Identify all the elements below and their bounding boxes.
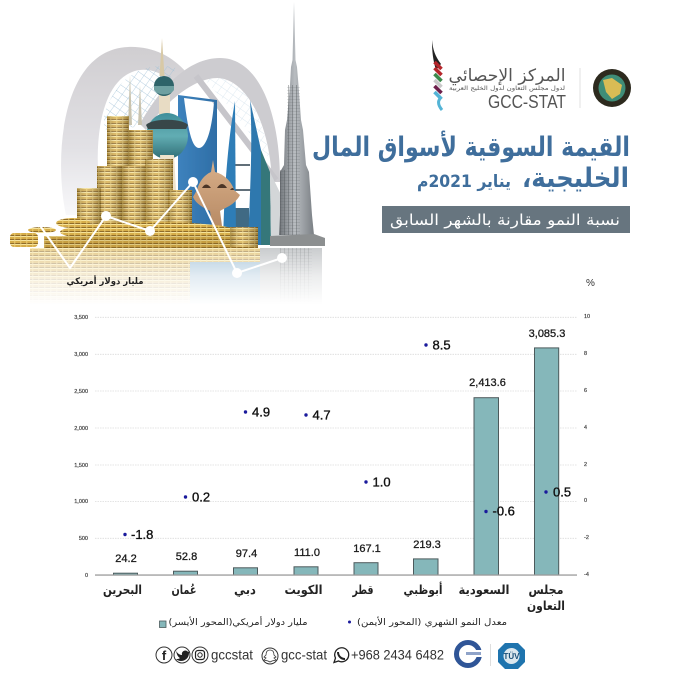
handle: gccstat: gccstat — [211, 646, 253, 662]
right axis: 8 — [584, 351, 587, 357]
category labels: التعاون — [527, 599, 565, 613]
bar value labels — [115, 328, 565, 565]
right axis: -2 — [584, 535, 589, 541]
gold coin stacks — [10, 116, 258, 248]
logo Arabic name: المركز الإحصائي — [448, 66, 566, 86]
icon: instagram — [192, 647, 208, 663]
left axis: 2,000 — [74, 426, 88, 432]
bar value labels: 111.0 — [294, 547, 320, 559]
bar value labels: 24.2 — [115, 553, 137, 565]
logo English name: GCC-STAT — [488, 91, 566, 112]
large grey arch — [61, 47, 186, 215]
Bahrain World Trade Centre — [223, 100, 292, 245]
handle: gcc-stat: gcc-stat — [281, 646, 327, 662]
combo chart — [74, 314, 590, 613]
right axis: 10 — [584, 314, 590, 320]
category labels: عُمان — [172, 583, 196, 597]
legend: مليار دولار أمريكي(المحور الأيسر) — [168, 616, 308, 628]
category labels: أبوظبي — [404, 581, 442, 597]
bar value labels: 52.8 — [176, 551, 197, 563]
icon: GCC emblem — [593, 69, 631, 107]
right axis: -4 — [584, 572, 589, 578]
icon: ribbon — [432, 40, 442, 110]
title — [312, 130, 630, 194]
category labels: قطر — [352, 583, 374, 597]
title line 2: الخليجية، — [522, 163, 629, 194]
growth rate dots and labels: -0.6 — [492, 504, 515, 518]
bar value labels: 2,413.6 — [469, 377, 506, 389]
right axis: 0 — [584, 498, 587, 504]
left axis unit label: مليار دولار أمريكي — [66, 275, 144, 287]
growth rate dots and labels: 8.5 — [432, 338, 451, 352]
ferris lattice — [198, 71, 270, 160]
icon: facebook — [156, 647, 172, 663]
thin spires behind coins — [128, 75, 142, 125]
bars — [114, 348, 559, 575]
left axis: 1,000 — [74, 499, 88, 505]
diagonal band — [196, 76, 276, 180]
left axis: 500 — [79, 536, 88, 542]
growth rate dots and labels: -1.8 — [131, 527, 153, 542]
legend — [160, 616, 507, 628]
growth rate dots and labels: 4.7 — [312, 408, 331, 422]
category labels — [103, 581, 565, 613]
icon: facebook: f — [162, 648, 167, 663]
growth rate dots and labels — [123, 338, 571, 542]
right axis: 4 — [584, 425, 587, 431]
logo: GCC-STAT — [432, 40, 631, 112]
category labels: البحرين — [103, 583, 142, 597]
growth rate dots and labels: 4.9 — [252, 404, 270, 420]
right axis unit label: % — [586, 278, 595, 289]
right axis: 2 — [584, 462, 587, 468]
phone number: +968 2434 6482 — [351, 646, 444, 662]
bar value labels: 167.1 — [353, 543, 381, 555]
subtitle bar: نسبة النمو مقارنة بالشهر السابق — [390, 211, 620, 229]
left axis: 1,500 — [74, 463, 88, 469]
Omani incense burner — [193, 160, 240, 226]
date: يناير 2021م — [417, 172, 511, 192]
lattice dome — [104, 66, 176, 130]
left axis — [74, 315, 88, 579]
certification badge: blue ring — [456, 642, 482, 666]
left axis: 2,500 — [74, 389, 88, 395]
illustration: Gulf landmarks and gold coins — [10, 2, 325, 304]
certification badge: TUV: TÜV — [504, 652, 520, 661]
category labels: السعودية — [458, 583, 510, 597]
category labels: مجلس — [528, 583, 564, 597]
left axis: 3,500 — [74, 315, 88, 321]
Burj Khalifa — [270, 2, 325, 246]
reflection — [30, 248, 322, 304]
left axis: 0 — [85, 573, 88, 579]
icon: snapchat — [262, 648, 278, 664]
growth rate dots and labels: 0.5 — [553, 484, 571, 500]
icon: twitter — [174, 647, 190, 663]
growth rate dots and labels: 1.0 — [372, 474, 391, 490]
bar value labels: 3,085.3 — [529, 328, 565, 340]
subtitle bar — [382, 206, 630, 233]
growth rate dots and labels: 0.2 — [192, 490, 210, 504]
left axis: 3,000 — [74, 352, 88, 358]
footer contacts — [156, 642, 525, 669]
bar value labels: 97.4 — [236, 548, 257, 560]
certification badge: TUV — [498, 643, 525, 669]
right axis: 6 — [584, 388, 587, 394]
right axis — [584, 314, 590, 578]
white trend line — [36, 177, 287, 278]
category labels: الكويت — [284, 583, 322, 597]
logo Arabic subtitle: لدول مجلس التعاون لدول الخليج العربية — [449, 85, 565, 92]
Kuwait towers — [146, 38, 188, 190]
right arch — [140, 58, 280, 182]
category labels: دبي — [234, 583, 256, 597]
Kingdom Centre tower — [178, 95, 217, 240]
legend: معدل النمو الشهري (المحور الأيمن) — [357, 616, 507, 628]
bar value labels: 219.3 — [413, 539, 441, 551]
icon: whatsapp — [334, 648, 349, 662]
